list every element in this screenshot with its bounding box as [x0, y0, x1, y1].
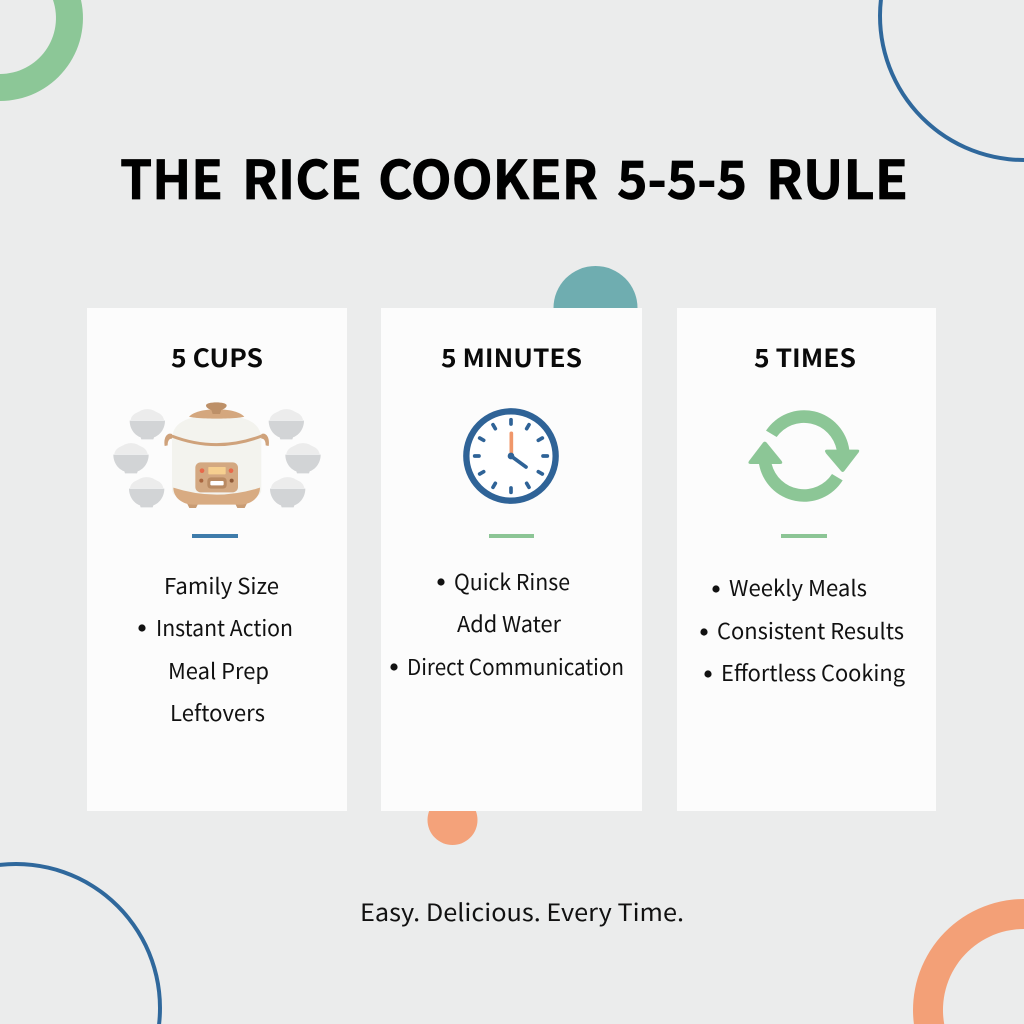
decorative circle: teal	[554, 266, 638, 350]
text: leftovers: Leftovers	[170, 696, 265, 728]
divider: blue	[192, 534, 238, 538]
heading: 5 minutes: 5 MINUTES	[441, 339, 582, 375]
panel: 5 cups	[87, 308, 347, 811]
bullet	[437, 578, 445, 586]
title: 5-5-5	[617, 139, 747, 215]
divider: green	[489, 534, 534, 538]
bullet	[712, 585, 720, 593]
title: RULE	[766, 139, 908, 215]
text: weekly meals: Weekly Meals	[729, 571, 867, 603]
icon: clock	[466, 411, 556, 501]
title: THE	[120, 139, 223, 215]
text: consistent results: Consistent Results	[717, 614, 904, 646]
title: RICE	[242, 139, 362, 215]
panel: 5 minutes	[381, 308, 642, 811]
decorative ring: top left green	[0, 0, 83, 101]
decorative circle: orange	[428, 795, 478, 845]
bullet	[700, 628, 708, 636]
text: family size: Family Size	[164, 569, 279, 601]
text: meal prep: Meal Prep	[168, 654, 269, 686]
decorative ring: top right blue	[878, 0, 1024, 162]
text: direct communication: Direct Communication	[407, 650, 624, 682]
bullet	[138, 624, 146, 632]
text: add water: Add Water	[457, 607, 561, 639]
decorative ring: bottom right orange	[913, 899, 1024, 1024]
divider: green	[781, 534, 827, 538]
bullet	[390, 663, 398, 671]
bullet	[704, 670, 712, 678]
text: effortless cooking: Effortless Cooking	[721, 656, 906, 688]
text: quick rinse: Quick Rinse	[454, 565, 570, 597]
icon: cycle arrows	[748, 410, 859, 502]
icon: rice cooker with six bowls	[113, 402, 321, 508]
text: instant action: Instant Action	[156, 611, 293, 643]
footer tagline: Easy. Delicious. Every Time.	[360, 893, 684, 928]
heading: 5 cups: 5 CUPS	[171, 339, 263, 375]
panel: 5 times	[677, 308, 936, 811]
heading: 5 times: 5 TIMES	[754, 339, 856, 375]
title: COOKER	[378, 139, 598, 215]
decorative ring: bottom left blue	[0, 862, 162, 1024]
